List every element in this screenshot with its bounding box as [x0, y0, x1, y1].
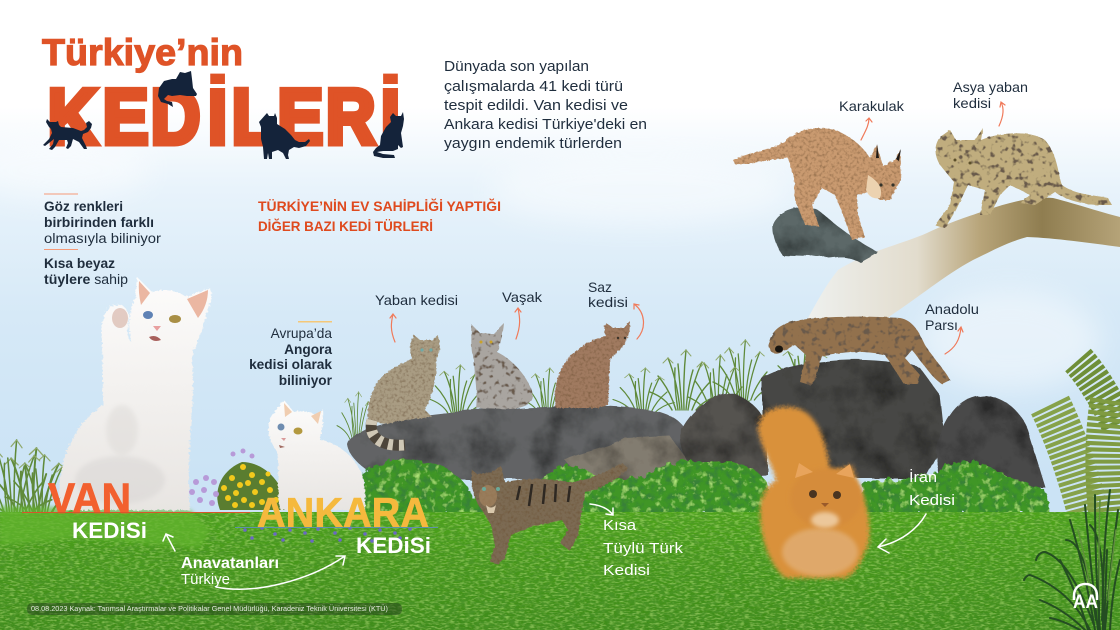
intro paragraph: çalışmalarda 41 kedi türü	[444, 79, 623, 95]
purple flowers on grass	[243, 526, 412, 543]
species labels: Parsı	[925, 317, 958, 333]
tree branch	[808, 198, 1120, 318]
footer source	[27, 603, 402, 615]
intro paragraph	[444, 59, 647, 152]
arrow: Iran	[878, 514, 926, 553]
short-hair cat label: Kısa	[603, 517, 637, 534]
icon: standing cat silhouette	[259, 113, 310, 159]
icon: lying cat silhouette	[158, 71, 197, 107]
intro paragraph: tespit edildi. Van kedisi ve	[444, 98, 628, 114]
Iran cat label	[909, 468, 955, 509]
Iran cat label: İran	[909, 468, 937, 486]
fern	[1050, 360, 1118, 512]
intro paragraph: Dünyada son yapılan	[444, 59, 589, 75]
dot gaps of the dotted letters	[205, 84, 406, 88]
van cat notes: birbirinden farklı	[44, 215, 154, 230]
Persian cat	[758, 407, 870, 578]
rocks	[348, 359, 1046, 490]
caracal	[733, 128, 901, 262]
footer source: 08.08.2023 Kaynak: Tarımsal Araştırmalar ve Politikalar Genel Müdürlüğü, Karadeniz Teknik Üniversitesi (KTÜ)	[31, 605, 388, 613]
clouds	[0, 140, 1100, 390]
short-haired Turkish cat	[471, 463, 628, 564]
Ankara kedisi label: ANKARA	[257, 489, 429, 536]
van cat notes	[44, 194, 162, 287]
icon: sitting cat silhouette	[373, 112, 404, 158]
AA logo: AA	[1073, 592, 1098, 613]
Ankara kedisi label: KEDiSi	[356, 533, 431, 558]
right rock	[935, 395, 1046, 490]
intro paragraph: Ankara kedisi Türkiye'deki en	[444, 117, 647, 133]
heading: other cat species: TÜRKİYE’NİN EV SAHİPLİĞİ YAPTIĞI	[258, 197, 501, 214]
van cat body	[59, 277, 211, 510]
species labels: kedisi	[953, 95, 991, 111]
Ankara kedisi label	[235, 489, 438, 558]
Iran cat label: Kedisi	[909, 492, 955, 509]
front rock	[565, 436, 690, 490]
jungle cat	[555, 321, 630, 408]
Van kedisi label: VAN	[48, 475, 131, 523]
homeland note: Türkiye	[181, 571, 230, 588]
species labels	[375, 79, 1028, 333]
icon: walking cat silhouette	[43, 119, 92, 150]
lynx	[471, 323, 533, 409]
Ankara note: biliniyor	[279, 373, 333, 388]
long rock	[348, 405, 690, 480]
species labels: Anadolu	[925, 301, 979, 317]
big square rock	[762, 359, 945, 478]
species labels: kedisi	[588, 294, 628, 310]
grass tufts behind rocks	[0, 340, 838, 526]
Van kedisi label	[22, 475, 250, 543]
intro paragraph: yaygın endemik türlerden	[444, 136, 622, 152]
ground grass	[0, 512, 1120, 630]
short-hair cat label: Kedisi	[603, 562, 650, 579]
species labels: Saz	[588, 279, 612, 295]
wild cat	[368, 335, 440, 445]
dark round rock	[682, 394, 768, 478]
title line 2: KEDİLERİ	[48, 73, 400, 161]
short-hair cat label: Tüylü Türk	[603, 540, 684, 557]
van cat notes: Kısa beyaz	[44, 256, 115, 271]
Van kedisi label: KEDiSi	[72, 518, 147, 543]
arrow: short-hair	[590, 504, 613, 515]
Ankara note: kedisi olarak	[249, 357, 332, 372]
stump	[773, 207, 878, 262]
species labels: Asya yaban	[953, 79, 1028, 95]
van cat notes: olmasıyla biliniyor	[44, 231, 162, 246]
Ankara cat	[269, 400, 365, 510]
Asian wildcat	[935, 128, 1112, 228]
title	[42, 32, 406, 161]
title line 1: Türkiye’nin	[42, 32, 243, 73]
Ankara note: Avrupa’da	[271, 326, 332, 341]
flowers	[189, 448, 288, 510]
species labels: Yaban kedisi	[375, 292, 458, 308]
shrubs	[362, 460, 1050, 514]
species labels: Karakulak	[839, 98, 905, 114]
orange arrows	[390, 102, 1005, 354]
heading: other cat species	[258, 197, 501, 234]
heading: other cat species: DİĞER BAZI KEDİ TÜRLERİ	[258, 217, 433, 234]
van cat notes: Göz renkleri	[44, 199, 123, 214]
homeland note: Anavatanları	[181, 555, 279, 572]
arrows: homeland	[163, 534, 345, 589]
species labels: Vaşak	[502, 289, 543, 305]
AA logo	[1073, 584, 1098, 613]
homeland note	[181, 555, 279, 588]
Ankara note	[249, 321, 333, 388]
Van cat	[59, 277, 211, 510]
bright grass strip	[0, 506, 210, 548]
plant: dark fronds bottom right	[1024, 490, 1120, 630]
Anatolian leopard	[769, 317, 950, 385]
van cat notes: tüylere sahip	[44, 272, 128, 287]
short-hair cat label	[603, 517, 684, 579]
Ankara note: Angora	[284, 342, 332, 357]
